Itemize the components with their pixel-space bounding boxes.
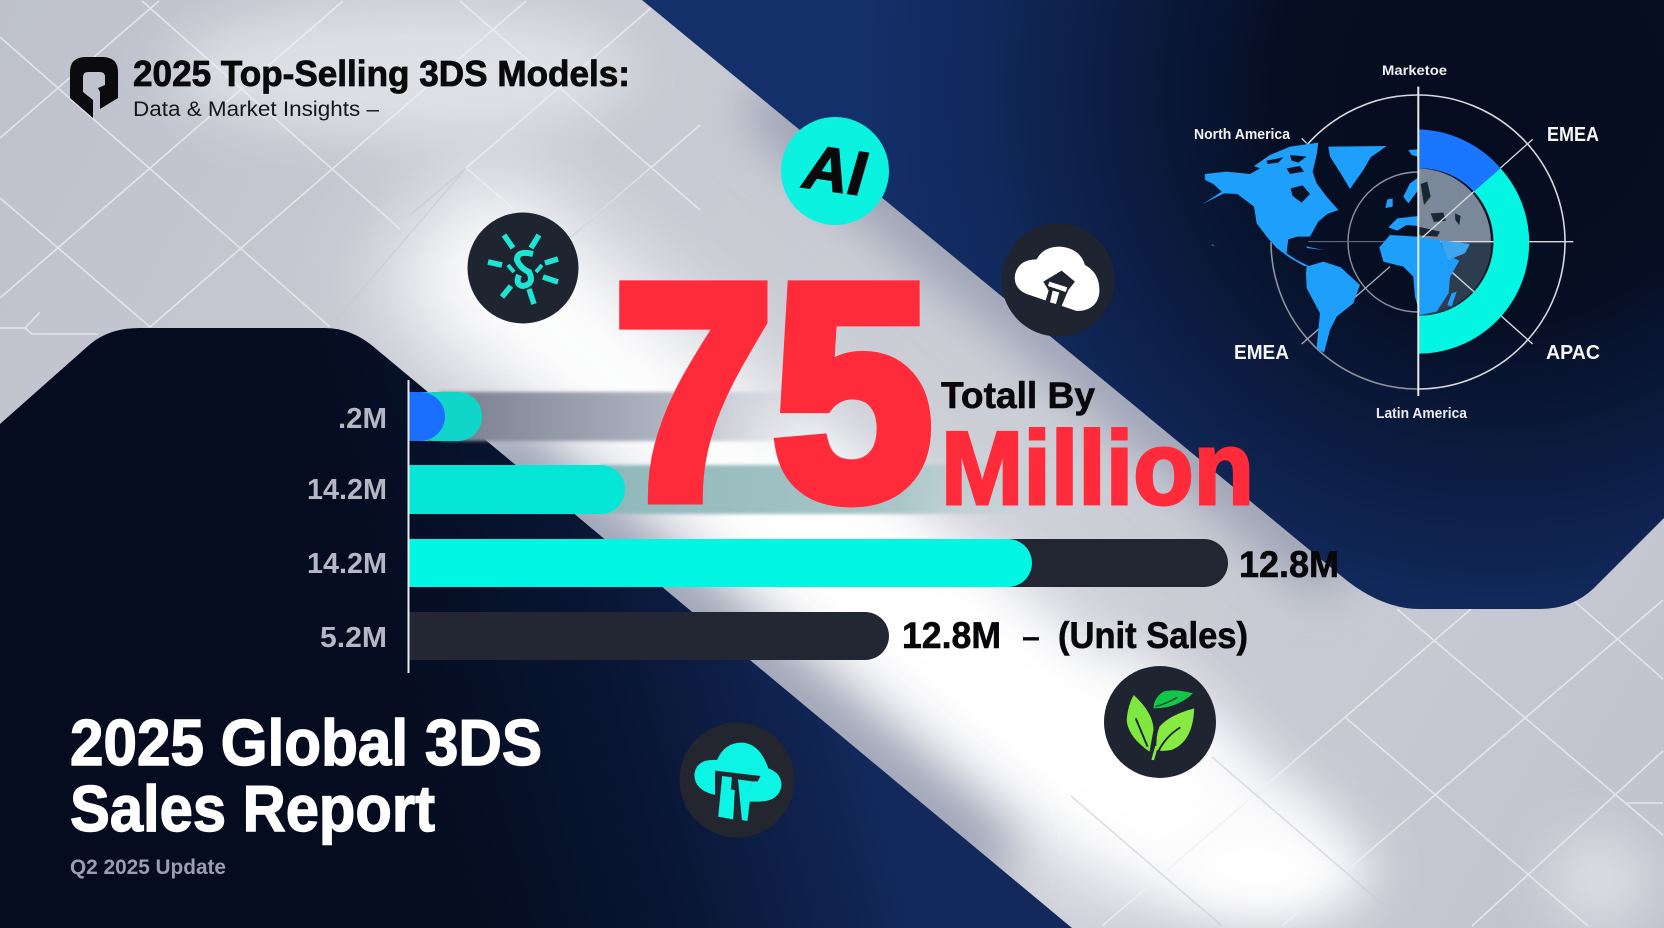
icon: link spark xyxy=(468,212,578,324)
bar 2 xyxy=(409,465,1100,514)
logo icon xyxy=(70,57,118,118)
region label: APAC: APAC xyxy=(1546,342,1600,364)
heading: report name xyxy=(70,706,542,879)
axis line xyxy=(408,380,410,673)
big number callout xyxy=(614,223,1254,562)
value label: row 3: 14.2M xyxy=(307,548,387,580)
region label: Marketoe: Marketoe xyxy=(1382,62,1447,78)
chart: regional market share radial map xyxy=(1194,62,1600,422)
label: Million: Million xyxy=(941,411,1254,527)
title: 2025 Top-Selling 3DS Models: xyxy=(133,53,630,94)
title line 2: Sales Report xyxy=(70,772,435,845)
inner disc xyxy=(1418,168,1492,316)
region label: Latin America: Latin America xyxy=(1376,405,1468,422)
value label: bar 4 right: 12.8M xyxy=(902,615,1001,656)
panel: navy lower-left xyxy=(0,328,1072,928)
value label: row 4: 5.2M xyxy=(320,622,387,654)
value label: row 2: 14.2M xyxy=(307,474,387,506)
bar chart: unit sales xyxy=(307,380,1339,673)
subtitle: Data & Market Insights – xyxy=(133,98,379,121)
label: Totall By: Totall By xyxy=(941,375,1095,416)
world map xyxy=(1203,143,1470,353)
unit label: (Unit Sales) xyxy=(1058,615,1248,656)
spokes behind segments xyxy=(1302,138,1573,344)
icon: green leaves xyxy=(1104,666,1216,778)
bar 1 xyxy=(409,392,820,441)
panel: navy upper-right xyxy=(642,0,1664,609)
dash: – xyxy=(1022,618,1040,656)
icon: white cloud xyxy=(1002,224,1114,336)
icon: AI badge xyxy=(781,117,889,225)
icon: AI badge: AI xyxy=(795,134,876,209)
region label: EMEA left: EMEA xyxy=(1234,342,1289,364)
value label: bar 3 right: 12.8M xyxy=(1239,544,1339,585)
segment: teal share xyxy=(1418,168,1529,354)
radial rings xyxy=(1271,95,1565,389)
value label: row 1: .2M xyxy=(338,403,387,435)
number: 75: 75 xyxy=(614,223,932,562)
icon: cyan cloud xyxy=(680,722,794,838)
date line: Q2 2025 Update xyxy=(70,856,226,879)
bar 4 xyxy=(409,612,889,660)
region label: North America: North America xyxy=(1194,127,1291,143)
segment: blue share xyxy=(1418,129,1501,192)
bar 3 xyxy=(409,539,1228,587)
title line 1: 2025 Global 3DS xyxy=(70,706,542,779)
region label: EMEA right: EMEA xyxy=(1547,124,1599,146)
vertical axis xyxy=(1415,87,1421,396)
heading: report title block xyxy=(133,53,630,121)
